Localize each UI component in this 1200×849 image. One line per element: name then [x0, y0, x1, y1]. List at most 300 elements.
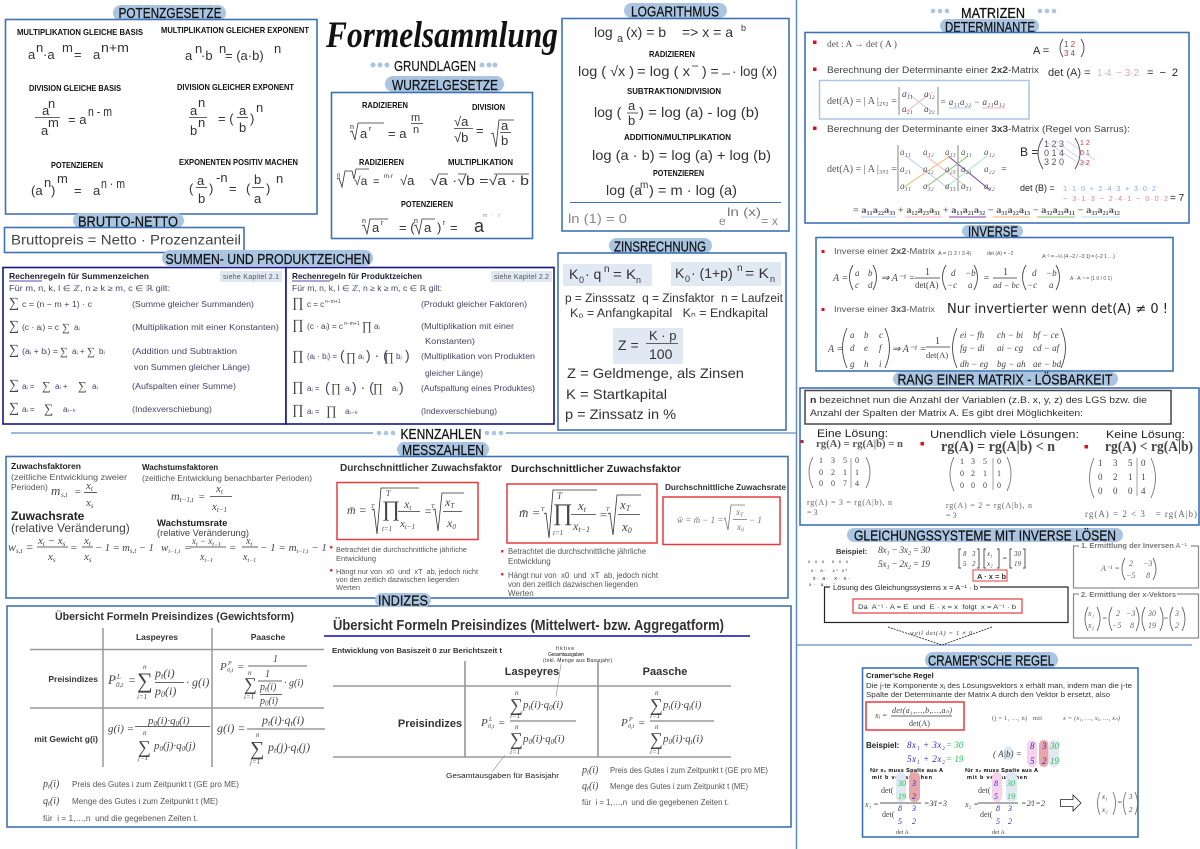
panel: Rechenregeln Produktzeichen: ∏ — [326, 403, 337, 418]
formula: root power: r — [443, 220, 446, 227]
table: Gewichtsform: Übersicht Formeln Preisindizes (Gewichtsform) — [55, 610, 294, 623]
formula: root to power: r — [369, 126, 372, 133]
heading: Potenzgesetze: POTENZGESETZE — [118, 5, 222, 22]
table: Gewichtsform: (i) — [163, 666, 175, 680]
heading: Summen- und Produktzeichen: SUMMEN- UND PRODUKTZEICHEN — [166, 251, 370, 268]
formula: 2x2 inverse: A = — [832, 273, 848, 284]
panel: Rechenregeln Summenzeichen: aᵢ — [92, 382, 98, 391]
box: solution — [824, 583, 1068, 622]
table: Gewichtsform: (i) — [267, 682, 277, 693]
text block: Zuwachsfaktoren: x — [38, 535, 43, 547]
formula: 2x2 inverse: d — [868, 280, 873, 290]
panel: Cramer'sche Regel: Die j-te Komponente xⱼ des Lösungsvektors x erhält man, indem man die j-te — [866, 681, 1132, 690]
box: Cramer formula: det(a₁,…,b,…,aₙ) — [892, 706, 952, 715]
annotation: Gesamtausgaben für Basisjahr — [446, 755, 560, 780]
table: Gewichtsform: t — [274, 746, 277, 755]
formula: x2: det A — [992, 830, 1005, 836]
panel: Determinante: det : A → det ( A ) — [827, 39, 897, 50]
formula: 2x2 inverse: d — [1032, 268, 1037, 278]
scattered note: x x x x x x — [808, 559, 849, 564]
box: Cramer formula: xⱼ = — [874, 711, 887, 720]
annotation: Gesamtausgaben für Basisjahr: Gesamtausgaben für Basisjahr — [446, 773, 560, 780]
formula: x2: det( — [980, 810, 993, 819]
handwriting: 3x3 example: det (B) = — [1020, 183, 1055, 193]
box: Ermittlung des x-Vektors — [1074, 590, 1198, 638]
panel: Rechenregeln Produktzeichen: (Aufspaltung eines Produktes) — [421, 384, 535, 393]
scattered note: x· a· x· — [809, 582, 839, 587]
text block: Zuwachsfaktoren: s — [89, 556, 92, 564]
table: Aggregatform: = — [498, 717, 505, 729]
formula: root power: ) — [437, 220, 441, 235]
formula: natural log: = x — [761, 214, 778, 228]
formula: division same exponent: a — [239, 103, 247, 118]
matrix: Sarrus rule: a₃₃ — [945, 181, 956, 191]
box: average growth factor 2: x — [620, 497, 626, 512]
case: Eine Lösung: 1 — [855, 468, 859, 477]
case: Eine Lösung: 0 — [855, 456, 859, 465]
panel: Potenzgesetze: EXPONENTEN POSITIV MACHEN — [179, 157, 298, 167]
formula: x2: 5 — [994, 792, 998, 801]
table: Aggregatform: Übersicht Formeln Preisindizes (Mittelwert- bzw. Aggregatform) — [333, 617, 724, 634]
table: Gewichtsform: Preis des Gutes i zum Zeitpunkt t (GE pro ME) — [72, 780, 239, 789]
scattered note — [808, 559, 849, 587]
formula: natural log: ln (1) = 0 — [568, 211, 627, 226]
box: average growth factor 2: T — [606, 507, 610, 513]
formula: 3x3 inverse: det(A) — [926, 350, 948, 360]
heading: Zinsrechnung: ZINSRECHNUNG — [614, 238, 706, 256]
matrix: Sarrus rule: a₃₁ — [961, 181, 972, 191]
panel: Rechenregeln Produktzeichen: ∏ — [292, 403, 304, 418]
formula: 3x3 inverse: b — [864, 330, 869, 340]
box: average growth factor 2: ∏ — [553, 500, 573, 526]
handwriting: 2x2 example: 1 2 — [1064, 40, 1076, 49]
formula: division same exponent: ) — [250, 111, 254, 126]
panel: Brutto-Netto — [4, 213, 244, 252]
matrix equation: 5 — [963, 560, 967, 568]
formula: compound interest with rate: · (1+p) — [691, 265, 733, 281]
table: Gewichtsform: t — [291, 719, 294, 728]
panel: Rechenregeln Summenzeichen: (Indexverschiebung) — [132, 405, 212, 414]
heading: Indizes: INDIZES — [378, 592, 428, 610]
box: average growth factor 1: Durchschnittlicher Zuwachsfaktor — [340, 463, 502, 474]
formula: natural log: e — [719, 214, 726, 228]
formula: positive exponent: ) — [209, 181, 213, 196]
box: average growth factor 1: x — [400, 518, 405, 530]
formula: 2x2 inverse: −c — [947, 280, 957, 290]
box: Ermittlung der Inversen — [1074, 541, 1198, 588]
case: Eine Lösung: = 3 — [807, 508, 818, 517]
box: solution: Lösung des Gleichungssystems x = A⁻¹ · b — [833, 583, 978, 592]
formula: log definition: => x = a — [682, 24, 733, 40]
heading: Matrizen: MATRIZEN — [961, 5, 1025, 22]
handwriting: 2x2 example: 1·4 — [1097, 68, 1112, 79]
annotation: fiktive Gesamtausgaben — [543, 646, 612, 697]
formula: multiplication same base: a — [93, 47, 101, 62]
formula: compound interest: 0 — [579, 275, 584, 285]
formula: compound interest: n — [636, 275, 641, 285]
heading: Grundlagen: GRUNDLAGEN — [394, 58, 476, 75]
box: average growth factor 1: T — [371, 504, 375, 510]
box: Ermittlung des x-Vektors: 8 — [1130, 621, 1134, 630]
formula: division same base: a — [41, 123, 49, 138]
box: average growth factor 2: T — [626, 504, 631, 513]
case: Keine Lösung: 1 — [1141, 472, 1146, 482]
table: Aggregatform: Preisindizes — [398, 718, 462, 730]
panel: Rechenregeln Summenzeichen: Rechenregeln für Summenzeichen — [9, 271, 149, 281]
table: Aggregatform: t — [668, 704, 672, 712]
table: Aggregatform: 0 — [549, 704, 553, 712]
panel: Gleichungssysteme mit Inverse lösen: Beispiel: — [836, 547, 867, 556]
formula: result vector — [1098, 792, 1138, 815]
panel: Rechenregeln Produktzeichen: ( — [340, 347, 345, 363]
table: Gewichtsform: 0,t — [116, 681, 124, 689]
text block: Zuwachsfaktoren: x — [48, 551, 53, 563]
table: Aggregatform: p — [582, 765, 587, 776]
case: Unendlich viele Lösungen: 0 — [997, 457, 1001, 466]
formula: positive exponent: n — [276, 171, 283, 186]
table: Gewichtsform: t — [48, 800, 51, 808]
formula: 2x2 inverse: a — [1049, 280, 1054, 290]
case: Unendlich viele Lösungen: 0 — [960, 481, 964, 490]
heading: Determinante: DETERMINANTE — [945, 19, 1035, 36]
arrow: dashed triangle: weil det(A) = 1 ≠ 0 — [910, 630, 973, 637]
panel: Wurzelgesetze: MULTIPLIKATION — [448, 157, 513, 167]
table: Gewichtsform: p — [262, 713, 268, 727]
box: Ermittlung des x-Vektors: 3 — [1174, 609, 1179, 618]
matrix: Sarrus rule: a₁₂ — [984, 147, 995, 157]
formula: compound interest with rate: = K — [745, 265, 770, 281]
box: 2x2 determinant: det(A) = | A |₂ₓ₂ = — [827, 96, 897, 107]
handwriting: 3x3 example: 1 2 — [1080, 140, 1090, 147]
table: Aggregatform: Paasche — [643, 666, 687, 678]
formula: multiplication same exponent — [185, 41, 281, 63]
case: Keine Lösung: rg(A) < rg(A|b) — [1105, 439, 1193, 455]
panel: Rechenregeln Summenzeichen: aᵢ + — [72, 347, 85, 356]
formula: result vector: 3 — [1128, 793, 1133, 801]
formula: Sarrus expansion: = a₁₁a₂₂a₃₃ + a₁₂a₂₃a₃₁ + a₁₃a₂₁a₃₂ − a₃₁a₂₂a₁₃ − a₃₂a₂₃a₁₁ − a₃₃a₂₁a₁₂ — [853, 206, 1120, 216]
formula: result vector: = — [1117, 798, 1122, 807]
table: Aggregatform: ∑ — [510, 695, 523, 715]
formula: interest: Z = — [618, 337, 639, 353]
case: Eine Lösung: 5 — [843, 456, 847, 465]
table: Gewichtsform: 0 — [176, 720, 180, 728]
note: invertibility: Nur invertierter wenn det(A) ≠ 0 ! — [947, 302, 1168, 317]
case: Eine Lösung: 1 — [843, 468, 847, 477]
formula: compound interest: n — [604, 264, 610, 275]
panel: Potenzgesetze: MULTIPLIKATION GLEICHER EXPONENT — [161, 25, 310, 35]
table: Aggregatform: ∑ — [650, 729, 663, 749]
formula: 3x3 inverse: A = — [827, 344, 843, 355]
text block: Zuwachsfaktoren: s — [63, 540, 66, 548]
table: Gewichtsform: p — [155, 666, 161, 680]
case: Eine Lösung: 4 — [855, 479, 859, 488]
table: Gewichtsform: ∑ — [244, 674, 257, 694]
table: Gewichtsform: Laspeyres — [136, 632, 178, 642]
panel: Rechenregeln Summenzeichen: ∑ — [9, 343, 19, 358]
box: 2x2 determinant: a₂₂ — [924, 104, 935, 114]
annotation: fiktive Gesamtausgaben: Gesamtausgaben — [548, 652, 584, 658]
formula: 3x3 inverse: g — [850, 359, 855, 369]
table: Gewichtsform: n — [143, 729, 147, 737]
formula: compound interest with rate: n — [737, 263, 743, 274]
panel: Zinsrechnung: Z = Geldmenge, als Zinsen — [567, 365, 744, 381]
case: Keine Lösung: 1 — [1098, 458, 1102, 468]
panel: Rechenregeln Produktzeichen: aᵢ — [358, 352, 364, 361]
table: Aggregatform: p — [523, 733, 528, 745]
box: average growth factor 1: T — [431, 504, 435, 510]
formula: 3x3 inverse: ch − bi — [997, 330, 1024, 340]
formula: positive exponent: a — [197, 173, 205, 188]
box: Ermittlung der Inversen: A⁻¹ = — [1100, 564, 1120, 573]
handwriting: 3x3 example: − 3·1·3 − 2·4·1 − 0·0·2 — [1063, 194, 1168, 203]
text block: Wachstumsfaktoren: t−1,t — [297, 549, 309, 555]
box: average growth factor 1: x — [447, 516, 452, 530]
panel: Inverse: Inverse einer 2x2 -Matrix — [834, 247, 935, 256]
formula: 3x3 inverse: f — [879, 343, 883, 353]
formula: 2x2 inverse: A · A⁻¹ = (1 0 / 0 1) — [1070, 276, 1112, 282]
formula: division same exponent: n — [198, 95, 205, 110]
table: Aggregatform: n — [655, 723, 659, 731]
box: 2x2 determinant: = a₁₁a₂₂ − a₂₁a₁₂ — [940, 97, 1005, 107]
matrix: Sarrus rule: a₂₃ — [945, 164, 956, 174]
panel: Rechenregeln Produktzeichen: (Multiplikation von Produkten — [421, 352, 535, 361]
formula: x2: 3 — [1007, 804, 1012, 813]
formula: log root: · log (x) — [732, 63, 777, 79]
table: Aggregatform: (i) — [691, 699, 702, 711]
panel: Zinsrechnung: p = Zinssatz in % — [565, 406, 676, 422]
box: average growth factor 1: t — [409, 504, 412, 512]
formula: power of power: n — [44, 175, 51, 190]
formula: 3x3 inverse: e — [864, 343, 868, 353]
formula: nested roots: n — [337, 173, 340, 179]
table: Gewichtsform: (j)·q — [276, 740, 297, 754]
box: Cramer formula: det(A) — [909, 719, 930, 728]
table: Aggregatform: t — [528, 704, 532, 712]
panel: Rechenregeln Summenzeichen: ∑ — [9, 378, 19, 393]
formula: interest — [613, 328, 683, 364]
table: Gewichtsform: · g(i) — [186, 675, 209, 689]
arrow: dashed triangle — [888, 627, 992, 645]
formula: 2x2 inverse — [832, 265, 1112, 290]
case: Unendlich viele Lösungen: Unendlich viele Lösungen: — [930, 429, 1079, 441]
formula: log division: ) = log (a) - log (b) — [639, 104, 759, 120]
panel: Zinsrechnung: K = Startkapital — [566, 386, 667, 402]
formula: nested roots: = — [373, 176, 379, 188]
formula: log definition: a — [617, 33, 624, 45]
formula: log root: log ( √x ) — [578, 63, 634, 79]
table: Gewichtsform: ∑ — [137, 668, 153, 693]
formula: division same base: a — [42, 103, 50, 118]
panel: Rechenregeln Summenzeichen: ∑ — [9, 401, 19, 416]
arrow: result — [1060, 795, 1081, 811]
table: Aggregatform: p — [663, 733, 668, 745]
panel: Cramer'sche Regel: Beispiel: — [866, 741, 899, 750]
heading: Matrizen — [931, 5, 1056, 22]
handwriting: 2x2 example: = − 2 — [1147, 67, 1178, 79]
table: Gewichtsform: 0 — [154, 720, 158, 728]
text block: Wachstumsfaktoren: x — [243, 552, 247, 563]
table: Gewichtsform: 1 — [273, 654, 278, 665]
formula: positive exponent: = — [229, 181, 237, 196]
box: solution: Da A⁻¹ · A = E und E · x = x folgt x = A⁻¹ · b — [858, 604, 1016, 611]
panel: Cramer'sche Regel: 5x₁ + 2x₂ — [907, 754, 945, 764]
box: Ermittlung des x-Vektors: x₂ — [1087, 621, 1095, 630]
bullet list 2: Werten — [508, 589, 534, 598]
matrix: Sarrus rule: a₂₂ — [984, 164, 995, 174]
box: Ermittlung des x-Vektors: 30 — [1147, 609, 1156, 618]
panel: Rechenregeln Summenzeichen: siehe Kapitel 2.1 — [223, 274, 279, 281]
formula: root division: a — [501, 118, 509, 133]
panel: Cramer'sche Regel: x = (x₁, …, xⱼ, …, xₙ) — [1062, 715, 1120, 722]
matrix: Sarrus rule: a₃₂ — [923, 181, 934, 191]
panel: Wurzelgesetze — [332, 76, 532, 238]
box: average growth rate: Durchschnittliche Zuwachsrate — [665, 483, 787, 492]
text block: Wachstumsfaktoren: t−1,t — [180, 496, 195, 504]
formula: division same exponent: b — [239, 120, 246, 135]
text block: Wachstumsfaktoren: (zeitliche Entwicklung benachbarter Perioden) — [142, 474, 312, 483]
table: Aggregatform: (i) — [589, 781, 599, 792]
panel: Cramer'sche Regel: 8x₁ + 3x₂ — [907, 740, 945, 750]
table: Gewichtsform: p — [260, 682, 265, 693]
formula: division same exponent: n — [256, 100, 263, 115]
formula: log division: b — [628, 113, 635, 128]
formula: log definition: log — [594, 24, 613, 40]
table: Gewichtsform: g(i) = — [217, 721, 245, 735]
panel: Rechenregeln Summenzeichen: aᵢ = — [22, 382, 35, 391]
panel: Potenzgesetze: POTENZIEREN — [51, 160, 103, 170]
text block: Zuwachsfaktoren: (relative Veränderung) — [11, 521, 130, 535]
text block: Zuwachsfaktoren: x — [84, 535, 89, 547]
panel: Rechenregeln Produktzeichen: ∏ — [384, 350, 394, 364]
box: average growth factor 2: m̄ = — [519, 505, 540, 520]
formula: natural log: ln (x) — [727, 205, 761, 219]
matrix equation: 2 — [972, 560, 976, 568]
handwriting: 2x2 example — [1033, 39, 1178, 79]
matrix: Sarrus rule: det(A) = | A |₃ₓ₃ = — [827, 164, 897, 175]
formula: root power: = — [450, 220, 458, 235]
augmented matrix: 5 — [1030, 756, 1035, 766]
formula: log division: log ( — [594, 104, 622, 120]
note: x2 column swap: für x₂ muss Spalte aus A — [965, 768, 1038, 774]
formula: interest: K · p — [649, 328, 676, 343]
box: Ermittlung des x-Vektors: −5 — [1112, 621, 1121, 630]
case: Keine Lösung: 0 — [1098, 486, 1103, 496]
heading: Cramer'sche Regel: CRAMER'SCHE REGEL — [928, 652, 1054, 670]
text block: Zuwachsfaktoren: s,t — [16, 547, 23, 555]
table: Aggregatform: i=1 — [650, 748, 660, 756]
panel: Rechenregeln Produktzeichen: (aᵢ · bᵢ) = — [307, 352, 337, 361]
box: 2x2 determinant: a₁₂ — [924, 89, 935, 99]
formula: compound interest: · q — [585, 266, 601, 282]
formula: 3x3 inverse: c — [879, 330, 883, 340]
text block: Wachstumsfaktoren: Wachstumsfaktoren — [142, 463, 218, 472]
formula: x1: det A — [896, 830, 909, 836]
panel: Determinante — [805, 19, 1189, 223]
table: Gewichtsform: t — [297, 746, 300, 755]
formula: compound interest — [569, 264, 641, 285]
case: Eine Lösung: Eine Lösung: — [817, 428, 888, 440]
formula: 3x3 inverse: cd − af — [1033, 343, 1061, 353]
text block: Wachstumsfaktoren: = — [184, 542, 191, 554]
panel: Rechenregeln Produktzeichen: ∏ — [346, 350, 356, 364]
formula: power of power: (a — [31, 183, 43, 198]
table: Aggregatform: (i)·q — [532, 733, 551, 745]
table: Gewichtsform: q — [43, 796, 48, 807]
formula: interest: 100 — [649, 346, 673, 362]
panel: Rechenregeln Produktzeichen: ( — [325, 379, 330, 395]
box: Ermittlung der Inversen: 2 — [1129, 559, 1133, 568]
box: Ermittlung des x-Vektors: 2 — [1116, 609, 1120, 618]
panel: Rechenregeln Summenzeichen: aᵢ — [74, 323, 80, 332]
box: average growth factor 2: 0 — [628, 526, 632, 535]
annotation: fiktive Gesamtausgaben: (inkl. Menge aus Basisjahr) — [543, 658, 612, 664]
matrix equation — [959, 549, 1025, 568]
formula: root to power — [350, 112, 423, 141]
panel: Rechenregeln Produktzeichen: gleicher Länge) — [425, 369, 483, 378]
formula: x2: 8 — [996, 804, 1000, 813]
formula: x2: det( — [978, 786, 991, 795]
box: average growth rate: w̄ = m̄ − 1 = — [677, 515, 723, 525]
handwriting: 3x3 example — [1020, 138, 1185, 204]
panel: Zinsrechnung: p = Zinsssatz q = Zinsfaktor n = Laufzeit — [565, 293, 784, 305]
formula: 3x3 inverse: bf − ce — [1033, 330, 1059, 340]
table: Aggregatform: (i) — [693, 733, 703, 745]
panel: Rechenregeln Summenzeichen: (Summe gleicher Summanden) — [132, 300, 254, 309]
bullet list 1: von den zeitlich dazwischen liegenden — [336, 575, 459, 584]
formula: 2x2 inverse: b — [868, 268, 873, 278]
panel: Rechenregeln Produktzeichen: ∏ — [373, 381, 383, 395]
panel: Rechenregeln Produktzeichen: ∏ — [362, 319, 372, 333]
matrix: Sarrus rule: = — [1001, 164, 1007, 175]
panel: Rechenregeln Summenzeichen: aᵢ = — [22, 405, 35, 414]
formula: x1: = 3/1 = 3 — [924, 799, 947, 808]
matrix equation: 19 — [1014, 560, 1022, 568]
panel: Inverse: Inverse einer 3x3 -Matrix — [834, 305, 935, 314]
formula: 3x3 inverse: ei − fh — [960, 330, 985, 340]
handwriting: 3x3 example: 1 2 3 — [1044, 139, 1064, 149]
panel: Potenzgesetze: DIVISION GLEICHE BASIS — [29, 83, 121, 93]
case: Eine Lösung: 0 — [819, 468, 823, 477]
matrix equation: x₁ — [986, 550, 993, 558]
matrix equation: x₂ — [986, 560, 993, 568]
box: average growth factor 2: x — [578, 498, 584, 513]
panel: Rechenregeln Summenzeichen: ∑ — [44, 401, 53, 416]
formula: 2x2 inverse: ad − bc — [993, 280, 1020, 290]
formula: multiplication same base — [28, 40, 129, 62]
panel: Logarithmus: POTENZIEREN — [653, 168, 704, 178]
panel: Rechenregeln Produktzeichen: bᵢ — [396, 352, 402, 361]
panel: Logarithmus: SUBTRAKTION/DIVISION — [627, 86, 721, 96]
text block: Wachstumsfaktoren — [142, 463, 327, 564]
formula: x1: x₁ = — [864, 800, 879, 809]
table: Gewichtsform: j=1 — [137, 754, 148, 762]
formula: x1: 2 — [912, 792, 916, 801]
table: Aggregatform: (i)·q — [672, 733, 691, 745]
box: average growth rate: x — [737, 522, 741, 532]
formula: log multiplication: log (a · b) = log (a) + log (b) — [592, 147, 771, 163]
formula: division same base: m — [48, 115, 59, 130]
box: average growth factor 1: x — [404, 497, 409, 511]
box: Ermittlung des x-Vektors: 19 — [1148, 621, 1156, 630]
case: Unendlich viele Lösungen — [920, 429, 1079, 520]
formula: log definition: (x) = b — [626, 24, 666, 40]
panel: Rechenregeln Produktzeichen: aᵢ = — [307, 384, 320, 393]
table: Aggregatform: 0,t — [488, 724, 494, 730]
box: average growth factor 1: ∏ — [382, 496, 400, 521]
formula: log definition: b — [741, 23, 746, 33]
formula: positive exponent: -n — [216, 170, 228, 185]
table: Aggregatform: (i) — [554, 733, 565, 745]
